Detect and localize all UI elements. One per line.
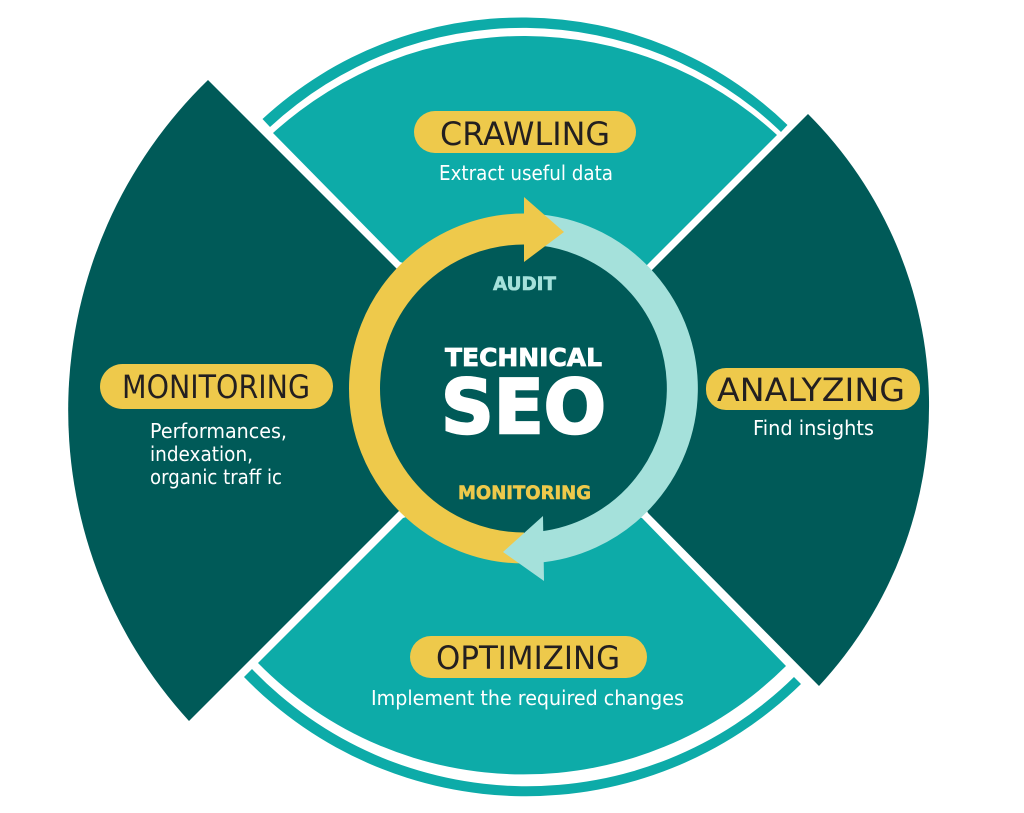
monitoring description [150, 419, 287, 489]
arrow: monitoring arc [364, 197, 564, 548]
crawling heading [414, 111, 636, 153]
panel: analyzing [600, 114, 929, 686]
monitoring description: organic traff ic [150, 465, 282, 489]
panel: optimizing [244, 480, 801, 796]
crawling heading: CRAWLING [440, 115, 610, 153]
title: SEO [441, 363, 606, 451]
panel: monitoring [68, 80, 440, 721]
monitoring heading: MONITORING [122, 368, 310, 406]
crawling description: Extract useful data [439, 161, 613, 185]
analyzing description: Find insights [753, 416, 874, 440]
optimizing heading: OPTIMIZING [436, 639, 620, 677]
monitoring label: MONITORING [458, 482, 591, 504]
optimizing description: Implement the required changes [371, 686, 684, 710]
audit label: AUDIT [493, 273, 556, 295]
analyzing heading: ANALYZING [717, 371, 905, 409]
monitoring description: Performances, [150, 419, 287, 443]
title: TECHNICAL [445, 343, 602, 372]
panel: crawling [262, 17, 788, 300]
arrow: audit arc [535, 230, 682, 548]
monitoring description: indexation, [150, 442, 253, 466]
arrow: audit head [503, 516, 544, 581]
center circle [372, 238, 672, 538]
cycle arrows [364, 197, 682, 581]
